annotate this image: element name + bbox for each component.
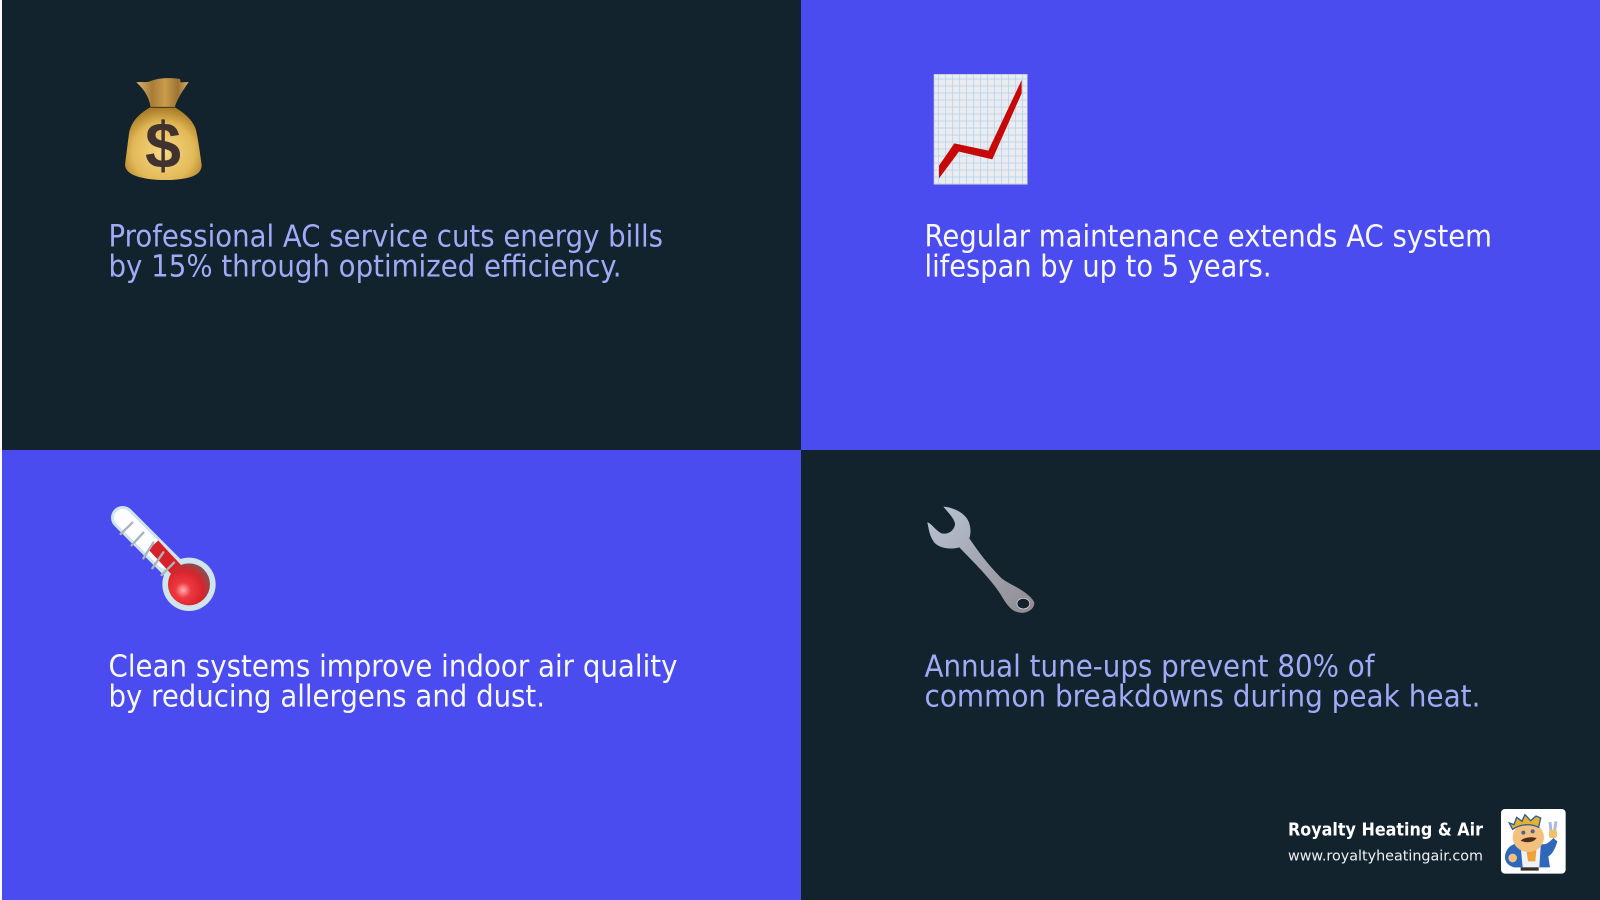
text: system lifespan [924,220,1492,285]
text: tune-ups: Annual tune-ups prevent 80% of [924,650,1376,685]
left edge strip [0,0,2,900]
text: energy bills: Professional AC service cuts energy bills [108,220,663,255]
logo: king mascot [1501,809,1566,874]
text: air quality: by reducing allergens and dust. [108,680,545,715]
icon: chart increasing [934,74,1027,184]
panel: system lifespan [801,0,1600,450]
text: air quality [108,650,678,715]
icon: thermometer [121,518,216,611]
text: tune-ups: common breakdowns during peak heat. [924,680,1480,715]
panel: energy bills [2,0,801,450]
text: air quality: Clean systems improve indoor air quality [108,650,678,685]
text: system lifespan: lifespan by up to 5 years. [924,250,1272,285]
text: energy bills: by 15% through optimized efficiency. [108,250,622,285]
text: energy bills [108,220,663,285]
panel: tune-ups [801,450,1600,900]
brand name: Royalty Heating & Air [1288,820,1483,841]
icon: wrench [927,507,1034,613]
brand url: www.royaltyheatingair.com [1288,848,1483,864]
brand block [1288,809,1566,874]
panel: air quality [2,450,801,900]
icon: money bag [125,78,202,181]
text: system lifespan: Regular maintenance extends AC system [924,220,1492,255]
text: tune-ups [924,650,1480,715]
dollar sign: $ [145,108,181,181]
